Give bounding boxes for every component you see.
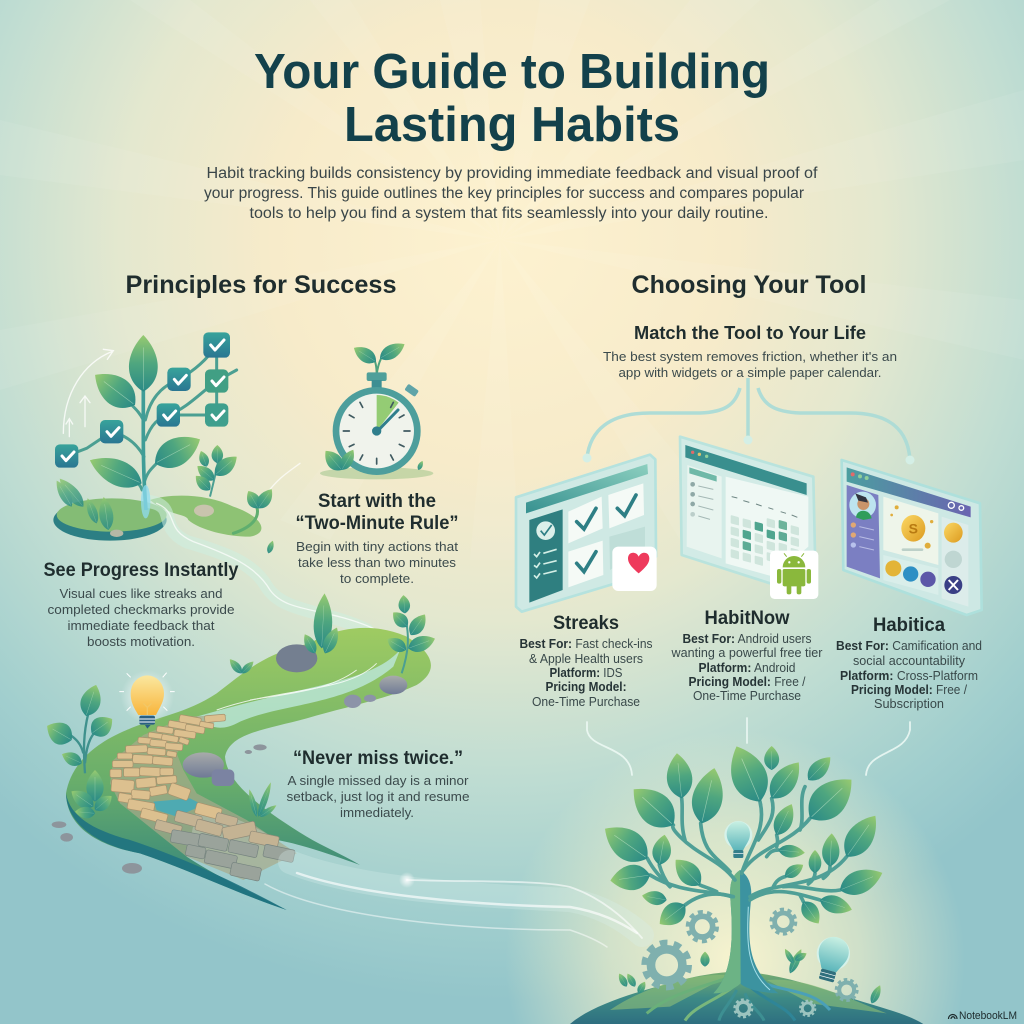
island under plant <box>53 496 261 541</box>
tool: habitnow details: Pricing Model: Free / <box>688 675 806 689</box>
tool: habitnow details <box>670 608 822 703</box>
sparkle <box>399 872 415 888</box>
tree glow <box>505 730 965 1024</box>
plant left of path <box>42 682 118 819</box>
trunk <box>713 870 778 993</box>
icon: light bulb <box>119 670 175 729</box>
habit calendar <box>731 507 799 576</box>
tool: habitica details: Subscription <box>874 697 944 711</box>
text: never miss twice: A single missed day is a minor <box>288 774 468 788</box>
text: never miss twice: “Never miss twice.” <box>293 748 463 769</box>
stream highlight lines <box>217 663 377 710</box>
lower stream swooshes <box>265 862 642 947</box>
text: see progress instantly <box>44 560 239 649</box>
intro paragraph: your progress. This guide outlines the key principles for success and compares popular <box>204 185 804 202</box>
tool: habitica details <box>836 615 982 711</box>
icon: bulb on ground <box>810 933 854 985</box>
plant stem <box>143 390 146 510</box>
tool: habitica details: social accountability <box>853 654 966 668</box>
pebbles <box>52 744 267 874</box>
island shadow edge <box>66 793 287 910</box>
small sprout <box>227 657 256 676</box>
connected branches <box>67 345 237 490</box>
card: habitnow <box>680 437 818 599</box>
tool: habitnow details: wanting a powerful free tier <box>670 646 822 660</box>
branches <box>647 787 847 905</box>
tool: habitica details: Platform: Cross-Platform <box>840 669 978 683</box>
text: start with the two-minute rule: to complete. <box>340 572 414 586</box>
tree leaves <box>596 740 887 932</box>
subheading and description: match the tool: Match the Tool to Your Life <box>634 323 866 343</box>
ground plants <box>52 475 115 531</box>
icon: bulb in tree <box>724 821 752 858</box>
card: streaks <box>516 455 657 612</box>
rock and leaf cluster <box>276 593 343 672</box>
tool: streaks details: Best For: Fast check-ins <box>520 637 652 651</box>
title: Your Guide to Building <box>254 45 770 99</box>
title <box>254 45 770 152</box>
illustration: habit tree <box>570 740 923 1024</box>
text: start with the two-minute rule: Begin with tiny actions that <box>296 540 459 554</box>
text: see progress instantly: boosts motivation. <box>87 635 195 649</box>
illustration: plant with checkmarks <box>52 332 373 630</box>
coins: S <box>909 520 918 536</box>
gap in path <box>153 798 203 817</box>
hill <box>570 972 923 1024</box>
heading: principles for success: Principles for Success <box>126 271 396 299</box>
middle island plants <box>227 593 438 676</box>
text: never miss twice: immediately. <box>340 806 414 820</box>
intro paragraph: tools to help you find a system that fits seamlessly into your daily routine. <box>250 205 768 222</box>
connectors to tree <box>587 718 910 775</box>
text: see progress instantly: completed checkmarks provide <box>48 603 235 617</box>
text: start with the two-minute rule: “Two-Minute Rule” <box>296 513 458 534</box>
upper stream <box>197 650 400 728</box>
sand cobblestones <box>110 714 295 881</box>
green island <box>66 628 431 910</box>
text: start with the two-minute rule <box>296 491 459 586</box>
small plant right <box>192 445 242 497</box>
text: see progress instantly: immediate feedback that <box>68 619 215 633</box>
text: start with the two-minute rule: take less than two minutes <box>298 556 456 570</box>
path bed <box>110 715 297 880</box>
icon: android tile <box>770 551 818 599</box>
tool: streaks details <box>520 613 652 709</box>
grass tuft <box>247 781 278 819</box>
badges <box>885 560 962 594</box>
intro paragraph: Habit tracking builds consistency by providing immediate feedback and visual proof of <box>206 165 818 182</box>
text: see progress instantly: Visual cues like streaks and <box>60 587 223 601</box>
text: never miss twice: setback, just log it and resume <box>286 790 470 804</box>
text: see progress instantly: See Progress Instantly <box>44 560 239 581</box>
sunburst rays <box>0 0 1024 560</box>
tool connectors <box>582 378 914 464</box>
intro paragraph <box>204 165 818 222</box>
tool: streaks details: Platform: IDS <box>550 666 622 680</box>
brand: notebooklm: NotebookLM <box>959 1010 1017 1022</box>
text: start with the two-minute rule: Start with the <box>318 491 436 512</box>
rocks <box>183 676 407 786</box>
heading: choosing your tool: Choosing Your Tool <box>632 271 866 299</box>
sprout <box>350 338 408 375</box>
tool: habitnow details: One-Time Purchase <box>693 689 801 703</box>
icon: stopwatch <box>320 338 433 479</box>
small leaves <box>320 446 425 475</box>
roots <box>647 977 830 1021</box>
tool: habitica details: Habitica <box>873 615 945 636</box>
text: never miss twice <box>286 748 470 820</box>
stones <box>110 505 214 537</box>
app cards <box>516 437 982 615</box>
sprout vine <box>233 486 277 554</box>
tool: streaks details: One-Time Purchase <box>532 695 640 709</box>
tool: habitica details: Pricing Model: Free / <box>851 683 967 697</box>
growth arrows <box>63 349 113 437</box>
tool: streaks details: & Apple Health users <box>529 652 643 666</box>
tool: streaks details: Pricing Model: <box>546 680 626 694</box>
illustration: cobblestone path island <box>42 628 431 910</box>
tool: streaks details: Streaks <box>553 613 619 634</box>
subheading and description: match the tool: The best system removes friction, whether it's an <box>603 350 897 364</box>
gears <box>644 909 857 1017</box>
grass patch <box>610 975 887 1013</box>
tool: habitnow details: Best For: Android users <box>682 632 812 646</box>
subheading and description: match the tool <box>603 323 897 380</box>
checkmark boxes <box>55 332 230 468</box>
winding stream <box>150 463 373 630</box>
subheading and description: match the tool: app with widgets or a simple paper calendar. <box>618 366 882 380</box>
tool: habitnow details: HabitNow <box>704 608 790 629</box>
icon: heart tile <box>612 547 657 591</box>
tool: habitica details: Best For: Camification and <box>836 639 982 653</box>
small foliage <box>616 947 884 1005</box>
tool: habitnow details: Platform: Android <box>698 661 796 675</box>
title: Lasting Habits <box>344 98 680 152</box>
leaves <box>85 335 207 495</box>
card: habitica <box>842 460 982 615</box>
sapling <box>384 595 438 673</box>
coins <box>890 505 963 568</box>
glowing stem base <box>141 485 150 518</box>
